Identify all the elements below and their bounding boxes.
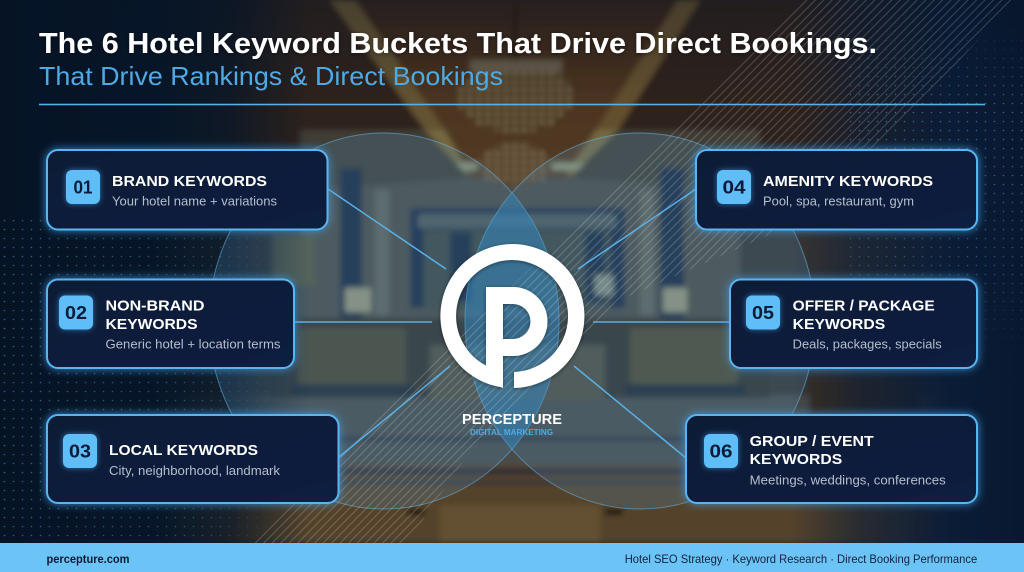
badge 03 — [63, 434, 97, 468]
heading — [793, 298, 935, 333]
heading: KEYWORDS — [106, 316, 198, 333]
heading: BRAND KEYWORDS — [112, 173, 267, 190]
panel: 03 local keywords — [47, 415, 338, 503]
heading: AMENITY KEYWORDS — [763, 173, 933, 190]
logo wordmark: DIGITAL MARKETING — [470, 428, 553, 437]
badge 04 — [717, 170, 751, 204]
description: Your hotel name + variations — [112, 194, 277, 208]
logo: percepture P mark — [440, 244, 584, 388]
chandelier: lower — [479, 144, 551, 186]
title: The 6 Hotel Keyword Buckets That Drive Direct Bookings. — [39, 28, 877, 60]
badge 01: 01 — [74, 178, 92, 198]
logo wordmark — [462, 412, 562, 437]
badge 02 — [59, 296, 93, 330]
header rule — [39, 104, 985, 105]
panel: 02 non-brand keywords — [47, 280, 294, 368]
heading: GROUP / EVENT — [750, 433, 874, 450]
overlapping circles — [209, 133, 815, 509]
connector lines — [294, 189, 730, 458]
heading — [750, 433, 874, 468]
description: Generic hotel + location terms — [106, 338, 280, 352]
footer bar — [0, 543, 1024, 572]
panel: 04 amenity keywords — [696, 150, 977, 230]
diagonal hatch band — [250, 0, 1015, 543]
dot pattern: right — [850, 20, 1024, 360]
description: Meetings, weddings, conferences — [750, 473, 946, 487]
panel: 05 offer / package keywords — [730, 280, 977, 368]
badge 02: 02 — [65, 303, 87, 323]
heading: KEYWORDS — [793, 316, 885, 333]
heading: KEYWORDS — [750, 451, 842, 468]
badge 05: 05 — [752, 303, 774, 323]
panel: 01 brand keywords — [47, 150, 328, 230]
chandelier: main — [458, 5, 574, 132]
heading: OFFER / PACKAGE — [793, 298, 935, 315]
logo wordmark: PERCEPTURE — [462, 412, 562, 428]
footer url: percepture.com — [46, 552, 130, 566]
heading: NON-BRAND — [106, 298, 205, 315]
panel: 06 group / event keywords — [686, 415, 977, 503]
badge 06: 06 — [710, 442, 732, 462]
footer tagline: Hotel SEO Strategy · Keyword Research · Direct Booking Performance — [625, 552, 978, 566]
badge 06 — [704, 434, 738, 468]
description: Deals, packages, specials — [793, 338, 942, 352]
heading — [106, 298, 205, 333]
badge 03: 03 — [69, 442, 91, 462]
subtitle: That Drive Rankings & Direct Bookings — [39, 61, 503, 91]
badge 01 — [66, 170, 100, 204]
description: Pool, spa, restaurant, gym — [763, 194, 914, 208]
badge 05 — [746, 296, 780, 330]
badge 04: 04 — [722, 178, 746, 198]
dot pattern: left — [0, 220, 290, 543]
heading: LOCAL KEYWORDS — [109, 442, 258, 459]
description: City, neighborhood, landmark — [109, 464, 281, 478]
